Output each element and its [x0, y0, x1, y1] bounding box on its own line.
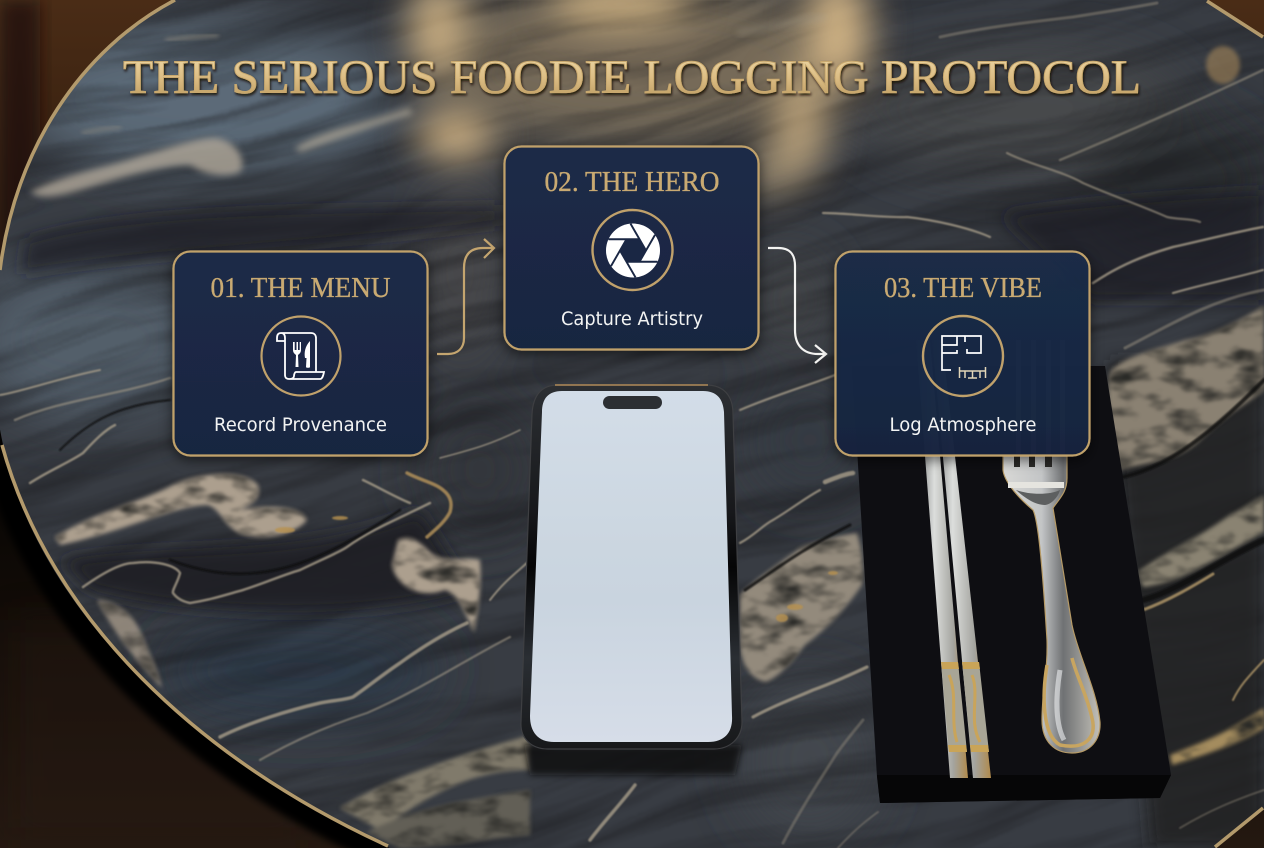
napkin and cutlery	[852, 340, 1171, 803]
dark marble bands	[20, 190, 1264, 848]
gold flecks	[275, 516, 838, 622]
title: THE SERIOUS FOODIE LOGGING PROTOCOL	[123, 51, 1141, 104]
heading: 01. THE MENU	[210, 272, 391, 304]
dynamic island	[603, 396, 662, 409]
step 1 card: the menu	[174, 252, 428, 456]
card panel	[504, 146, 758, 350]
phone body	[521, 385, 742, 749]
caption: Capture Artistry	[561, 308, 703, 330]
icon: floor plan	[923, 316, 1003, 396]
step 3 card: the vibe	[836, 252, 1090, 456]
soft upper marble patches	[30, 108, 412, 196]
heading: 03. THE VIBE	[884, 272, 1042, 304]
fork	[1003, 340, 1100, 753]
phone reflection	[524, 745, 742, 775]
caption: Log Atmosphere	[890, 414, 1036, 436]
phone	[521, 385, 742, 775]
dark vein lines	[60, 380, 1264, 600]
warm light reflections	[408, 0, 870, 197]
card panel	[836, 252, 1090, 456]
card panel	[174, 252, 428, 456]
caption: Record Provenance	[214, 414, 387, 436]
chopsticks	[916, 340, 991, 778]
icon: menu scroll with cutlery	[262, 316, 340, 396]
marble tan patches	[55, 306, 1264, 848]
icon: camera aperture	[592, 210, 672, 290]
arrow: step 1 to step 2	[437, 239, 494, 354]
napkin	[852, 366, 1171, 803]
phone screen	[530, 391, 732, 742]
phone gold top edge	[555, 384, 708, 386]
step 2 card: the hero	[504, 146, 758, 350]
arrow: step 2 to step 3	[768, 248, 826, 363]
heading: 02. THE HERO	[544, 166, 720, 198]
